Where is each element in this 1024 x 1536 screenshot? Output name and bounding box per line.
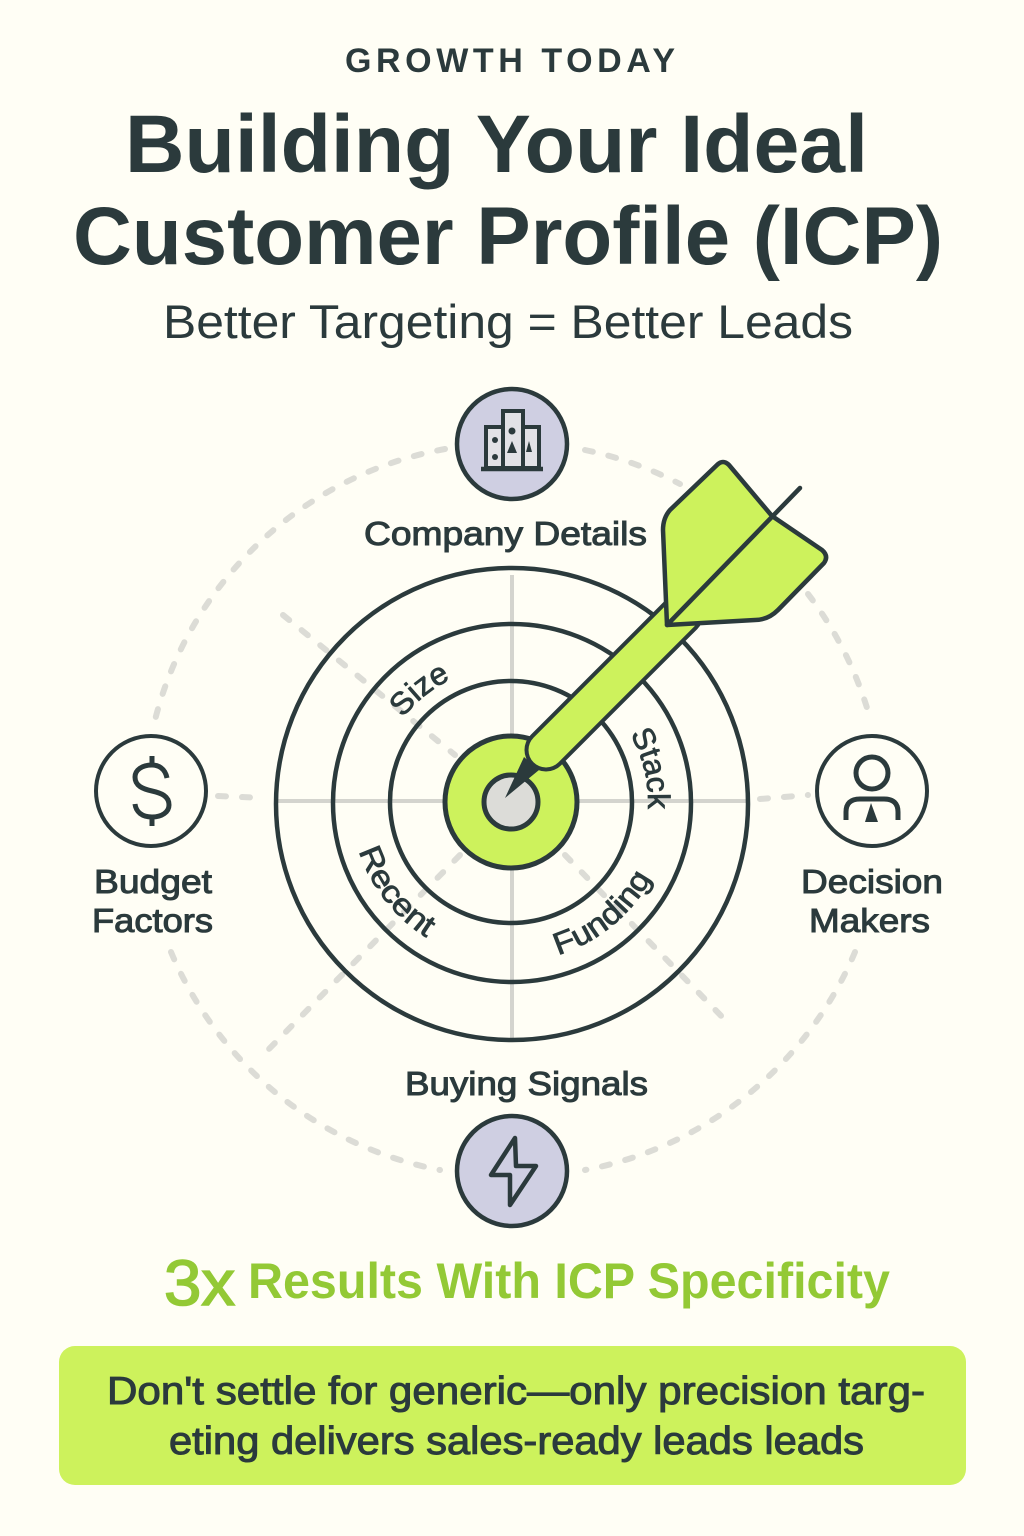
ring label: Stack: Stack xyxy=(632,728,671,810)
icon: company buildings xyxy=(457,389,567,499)
callout: Don't settle for generic—only precision targ- xyxy=(107,1370,925,1413)
label: Decision Makers: Makers xyxy=(809,902,930,939)
title: Building Your Ideal xyxy=(125,99,868,190)
target rings xyxy=(276,568,748,1040)
callout xyxy=(59,1346,966,1485)
stat: 3x results: Results With ICP Specificity xyxy=(248,1253,890,1309)
icon: decision maker xyxy=(817,736,927,846)
dashed orbit connecting the five factors xyxy=(155,449,870,1170)
subtitle: Better Targeting = Better Leads xyxy=(163,295,853,348)
title: Customer Profile (ICP) xyxy=(73,191,943,282)
label: Budget Factors xyxy=(92,863,213,939)
stat: 3x results: 3x xyxy=(164,1247,235,1319)
title xyxy=(73,99,943,282)
label: Buying Signals: Buying Signals xyxy=(405,1065,648,1102)
label: Decision Makers: Decision xyxy=(801,863,943,900)
callout: eting delivers sales-ready leads leads xyxy=(169,1420,864,1463)
ring label: Size: Size xyxy=(390,667,448,714)
label: Budget Factors: Budget xyxy=(94,863,212,900)
bullseye xyxy=(445,736,577,868)
target crosshair xyxy=(278,575,748,1038)
icon: lightning bolt xyxy=(457,1116,567,1226)
label: Budget Factors: Factors xyxy=(92,902,213,939)
ring label: Funding: Funding xyxy=(552,871,654,955)
label: Decision Makers xyxy=(801,863,943,939)
dart xyxy=(505,462,826,798)
label: Company Details: Company Details xyxy=(364,515,647,552)
ring label: Recent: Recent xyxy=(359,845,436,938)
stat: 3x results xyxy=(164,1247,890,1319)
eyebrow heading: GROWTH TODAY xyxy=(345,42,675,80)
icon: dollar budget xyxy=(96,736,206,846)
